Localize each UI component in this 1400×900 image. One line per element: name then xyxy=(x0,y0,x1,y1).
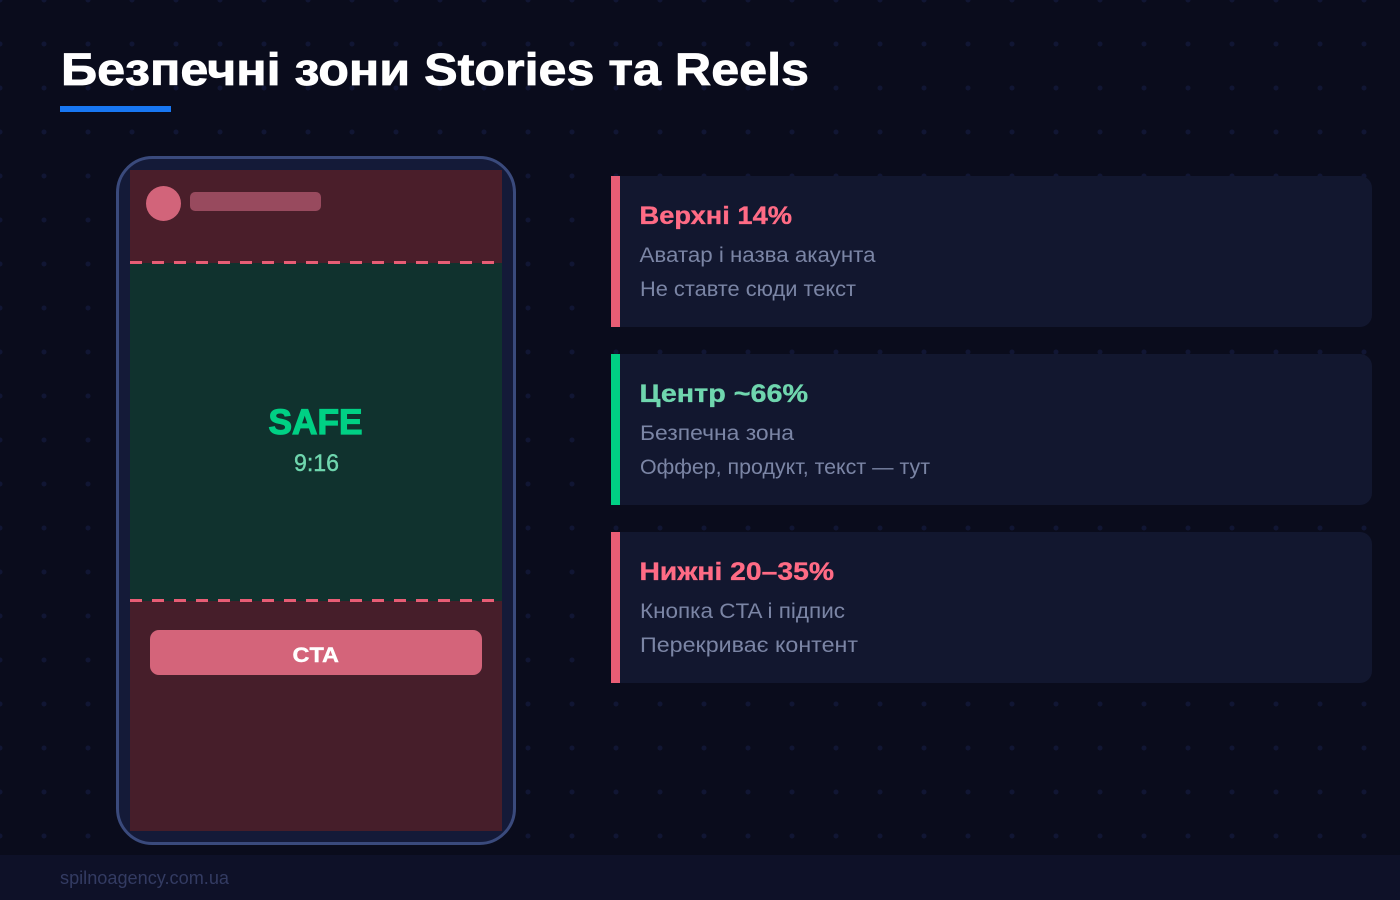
title underline xyxy=(60,106,171,112)
account name bar xyxy=(190,192,321,211)
phone body xyxy=(118,158,514,844)
bottom unsafe zone xyxy=(130,601,502,831)
card: bottom zone xyxy=(611,532,1372,683)
card line 2: Не ставте сюди текст xyxy=(640,277,856,301)
card line 1: Кнопка CTA і підпис xyxy=(640,599,845,623)
card line 1: Безпечна зона xyxy=(640,421,794,445)
top unsafe zone xyxy=(130,170,502,263)
card: centre zone xyxy=(611,354,1372,505)
title: Безпечні зони Stories та Reels xyxy=(61,44,809,95)
footer xyxy=(0,855,1400,900)
CTA label: CTA xyxy=(292,644,339,667)
card line 2: Перекриває контент xyxy=(640,633,858,657)
avatar xyxy=(146,186,181,221)
card heading: Нижні 20–35% xyxy=(640,558,834,586)
central safe zone xyxy=(130,263,502,601)
card line 1: Аватар і назва акаунта xyxy=(640,243,876,267)
card line 2: Оффер, продукт, текст — тут xyxy=(640,455,930,479)
card: top zone xyxy=(611,176,1372,327)
safe label: SAFE xyxy=(268,403,362,442)
phone mockup xyxy=(118,158,514,844)
bottom dashed boundary xyxy=(130,599,502,602)
top dashed boundary xyxy=(130,261,502,264)
footer site name: spilnoagency.com.ua xyxy=(60,868,230,888)
aspect ratio: 9:16 xyxy=(294,450,339,477)
CTA button xyxy=(150,630,482,675)
card heading: Центр ~66% xyxy=(640,380,808,408)
card heading: Верхні 14% xyxy=(640,202,792,230)
